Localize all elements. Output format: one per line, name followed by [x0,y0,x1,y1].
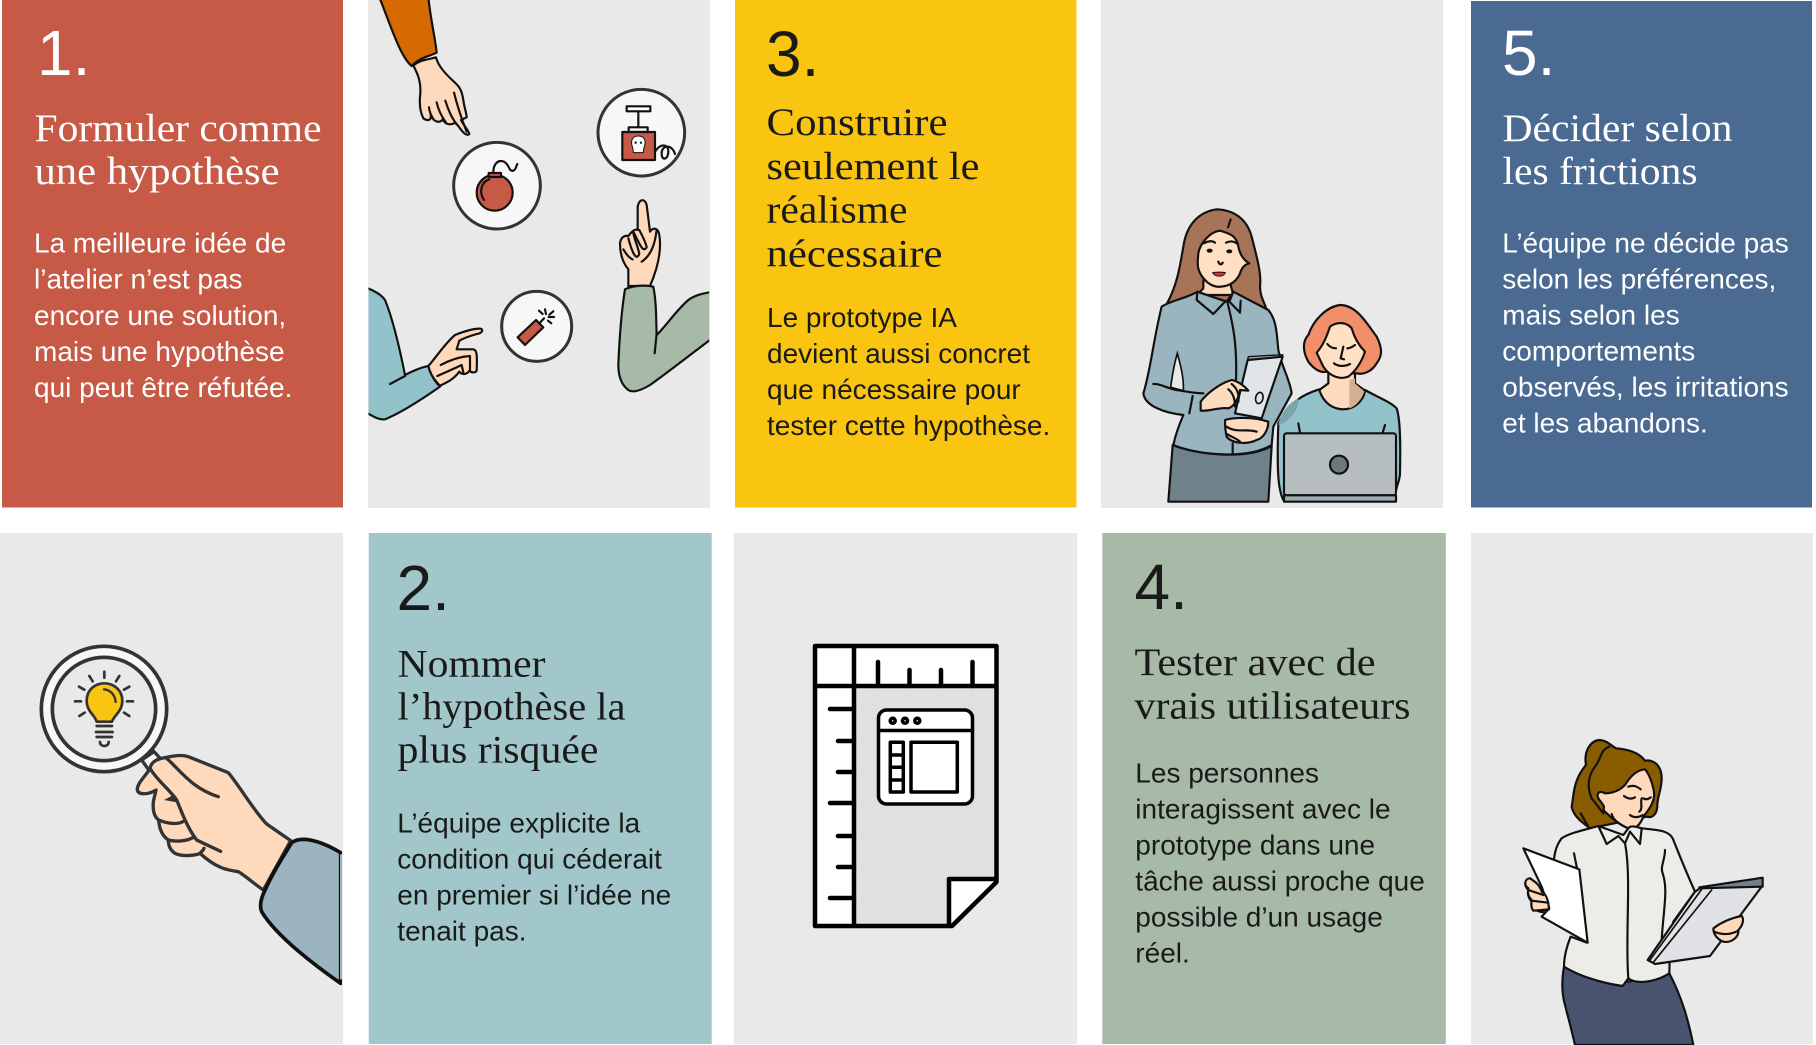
heading step 4: vrais utilisateurs [1134,684,1410,728]
heading step 3: réalisme [766,189,908,232]
body step 5: selon les préférences, [1502,264,1776,295]
panel: step 4 tester [1102,533,1446,1044]
body step 2: en premier si l’idée ne [397,880,671,911]
heading step 3 [766,101,980,276]
paper [1525,878,1552,913]
illustration: two colleagues with tablet and laptop [1143,209,1400,502]
heading step 2: Nommer [398,642,546,686]
hair [1572,740,1662,828]
body step 3 [767,302,1050,441]
body step 1 [34,228,292,403]
panel: magnifier illustration [0,533,343,1044]
body step 2: tenait pas. [397,916,527,947]
body step 2 [397,808,671,947]
hand [137,755,291,890]
sleeve [261,839,341,983]
browser window [878,710,972,804]
blouse [1553,826,1695,986]
heading step 2 [398,642,626,772]
body step 1: mais une hypothèse [34,336,285,367]
heading step 3: seulement le [766,145,980,188]
icon: lightbulb [75,672,133,746]
panel: hands illustration [363,0,713,508]
heading step 2: plus risquée [398,728,598,772]
panel: two women illustration [1101,0,1443,508]
body step 3: que nécessaire pour [767,374,1021,405]
sleeve teal and hand [363,287,482,419]
number 4: 4. [1134,551,1188,623]
sleeve sage and hand [618,200,713,391]
icon: dynamite [502,291,572,361]
panel: step 3 construire [735,0,1076,508]
heading step 1 [34,107,322,193]
body step 4: réel. [1135,938,1190,969]
panel: reading woman illustration [1471,533,1813,1045]
heading step 1: une hypothèse [34,150,280,193]
body step 3: tester cette hypothèse. [767,410,1050,441]
heading step 2: l’hypothèse la [398,686,626,728]
illustration: hands pointing at risks [363,0,713,419]
body step 4 [1135,758,1425,969]
body step 4: prototype dans une [1135,830,1375,861]
body step 3: Le prototype IA [767,302,957,333]
body step 2: L’équipe explicite la [397,808,641,839]
illustration: woman reading documents [1523,740,1763,1045]
sleeve orange [379,0,437,66]
magnifier [41,646,167,772]
heading step 5: Décider selon [1502,107,1732,150]
heading step 3: nécessaire [766,233,942,276]
panel: prototype illustration [734,533,1077,1044]
icon: bomb [454,142,540,229]
body step 2: condition qui céderait [397,844,662,875]
body step 1: l’atelier n’est pas [34,264,243,295]
body step 4: tâche aussi proche que [1135,866,1425,897]
body step 4: interagissent avec le [1135,794,1391,825]
body step 5: L’équipe ne décide pas [1502,228,1789,259]
standing woman [1143,209,1292,502]
body step 1: encore une solution, [34,300,286,331]
heading step 5: les frictions [1502,150,1698,193]
heading step 5 [1502,107,1732,193]
seated woman with laptop [1278,305,1400,502]
heading step 4: Tester avec de [1134,641,1376,684]
panel: step 5 décider [1471,1,1812,508]
number 1: 1. [37,17,90,89]
body step 5: mais selon les [1502,300,1680,331]
body step 4: Les personnes [1135,758,1319,789]
panel: step 2 nommer [369,533,712,1044]
folder [1699,878,1763,893]
hand pointing down [413,57,469,135]
body step 5: comportements [1502,336,1695,367]
number 2: 2. [396,552,450,624]
body step 5: observés, les irritations [1502,372,1789,403]
face [1598,769,1654,829]
body step 1: La meilleure idée de [34,228,286,259]
illustration: hand holding magnifier with lightbulb [41,646,343,987]
body step 5: et les abandons. [1502,408,1708,439]
icon: prototype document with rulers [815,646,997,926]
number 3: 3. [766,18,819,90]
body step 4: possible d’un usage [1135,902,1383,933]
heading step 1: Formuler comme [34,107,322,150]
panel: step 1 formuler [2,0,343,508]
heading step 3: Construire [766,101,948,144]
heading step 4 [1134,641,1410,728]
skirt [1562,967,1693,1045]
icon: detonator [598,89,685,176]
body step 1: qui peut être réfutée. [34,372,292,403]
body step 5 [1502,228,1789,439]
number 5: 5. [1502,17,1555,89]
body step 3: devient aussi concret [767,338,1030,369]
